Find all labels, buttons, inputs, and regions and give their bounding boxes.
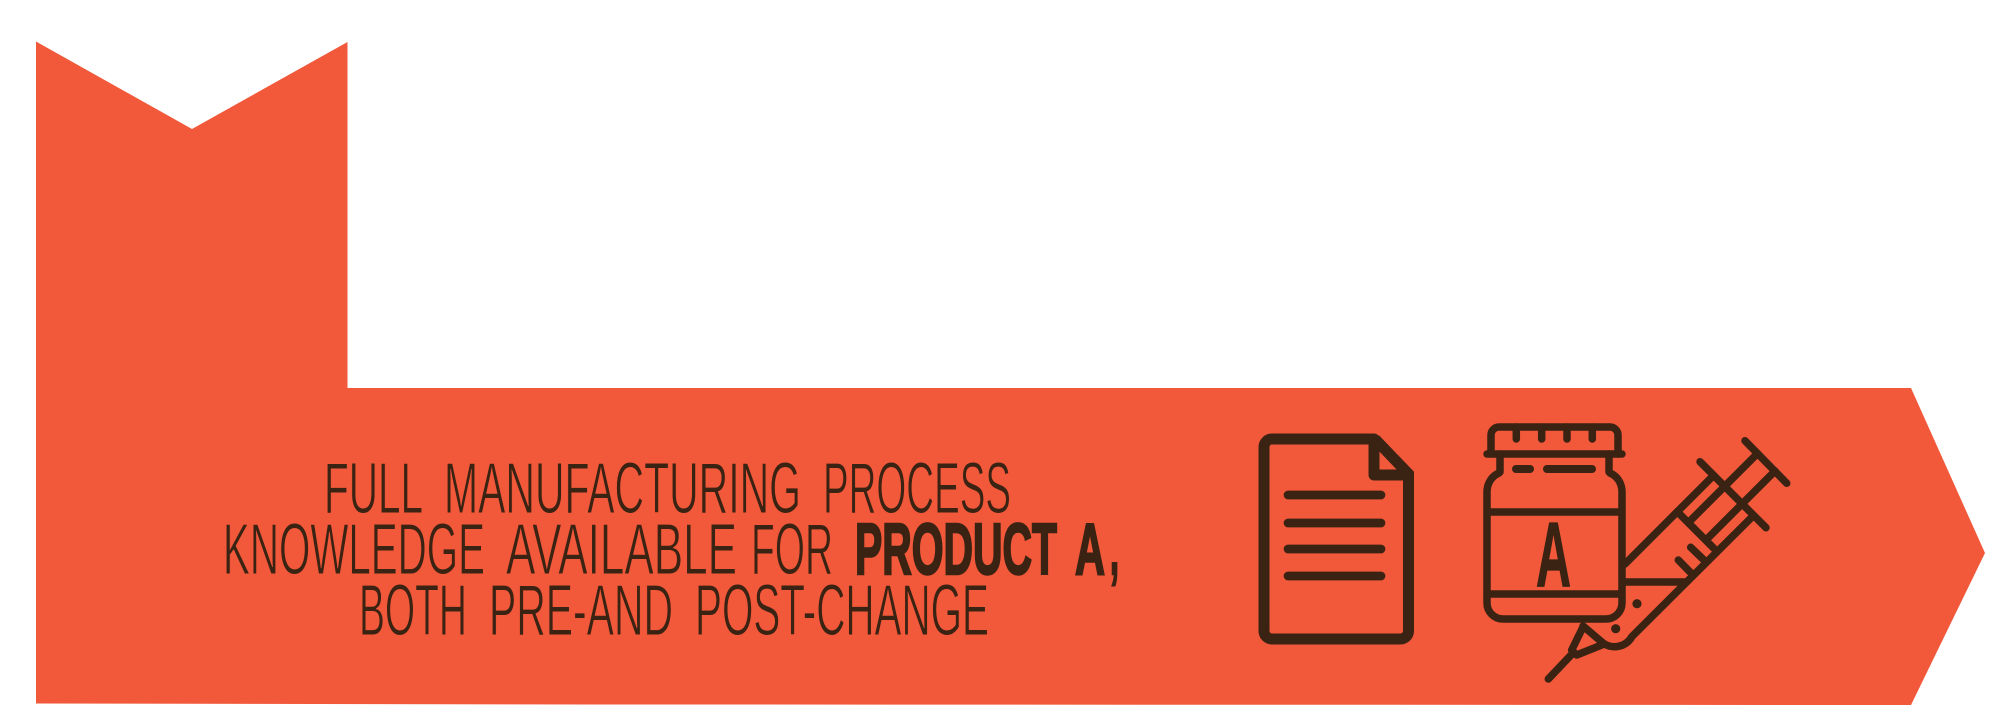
text line 1: PROCESS (823, 448, 1011, 529)
text line 1: FULL (324, 448, 423, 529)
text line 2: KNOWLEDGE (223, 509, 485, 590)
text line 3: PRE-AND (489, 570, 673, 651)
text: , (1110, 509, 1119, 590)
text line 1: MANUFACTURING (444, 448, 801, 529)
text line 2: A (1075, 509, 1105, 590)
text line 3: BOTH (359, 570, 467, 651)
text line 2: AVAILABLE (506, 509, 737, 590)
text line 3 (359, 570, 989, 651)
vial letter A: A (1536, 504, 1571, 606)
text block: main statement (223, 448, 1119, 651)
text line 2: PRODUCT (855, 509, 1057, 590)
text line 2: FOR (751, 509, 833, 590)
text line 3: POST-CHANGE (695, 570, 989, 651)
icon: syringe (1548, 441, 1787, 679)
text line 2 (223, 509, 1119, 590)
icon: document (1264, 439, 1408, 639)
icon: vial labelled A (1487, 427, 1622, 619)
